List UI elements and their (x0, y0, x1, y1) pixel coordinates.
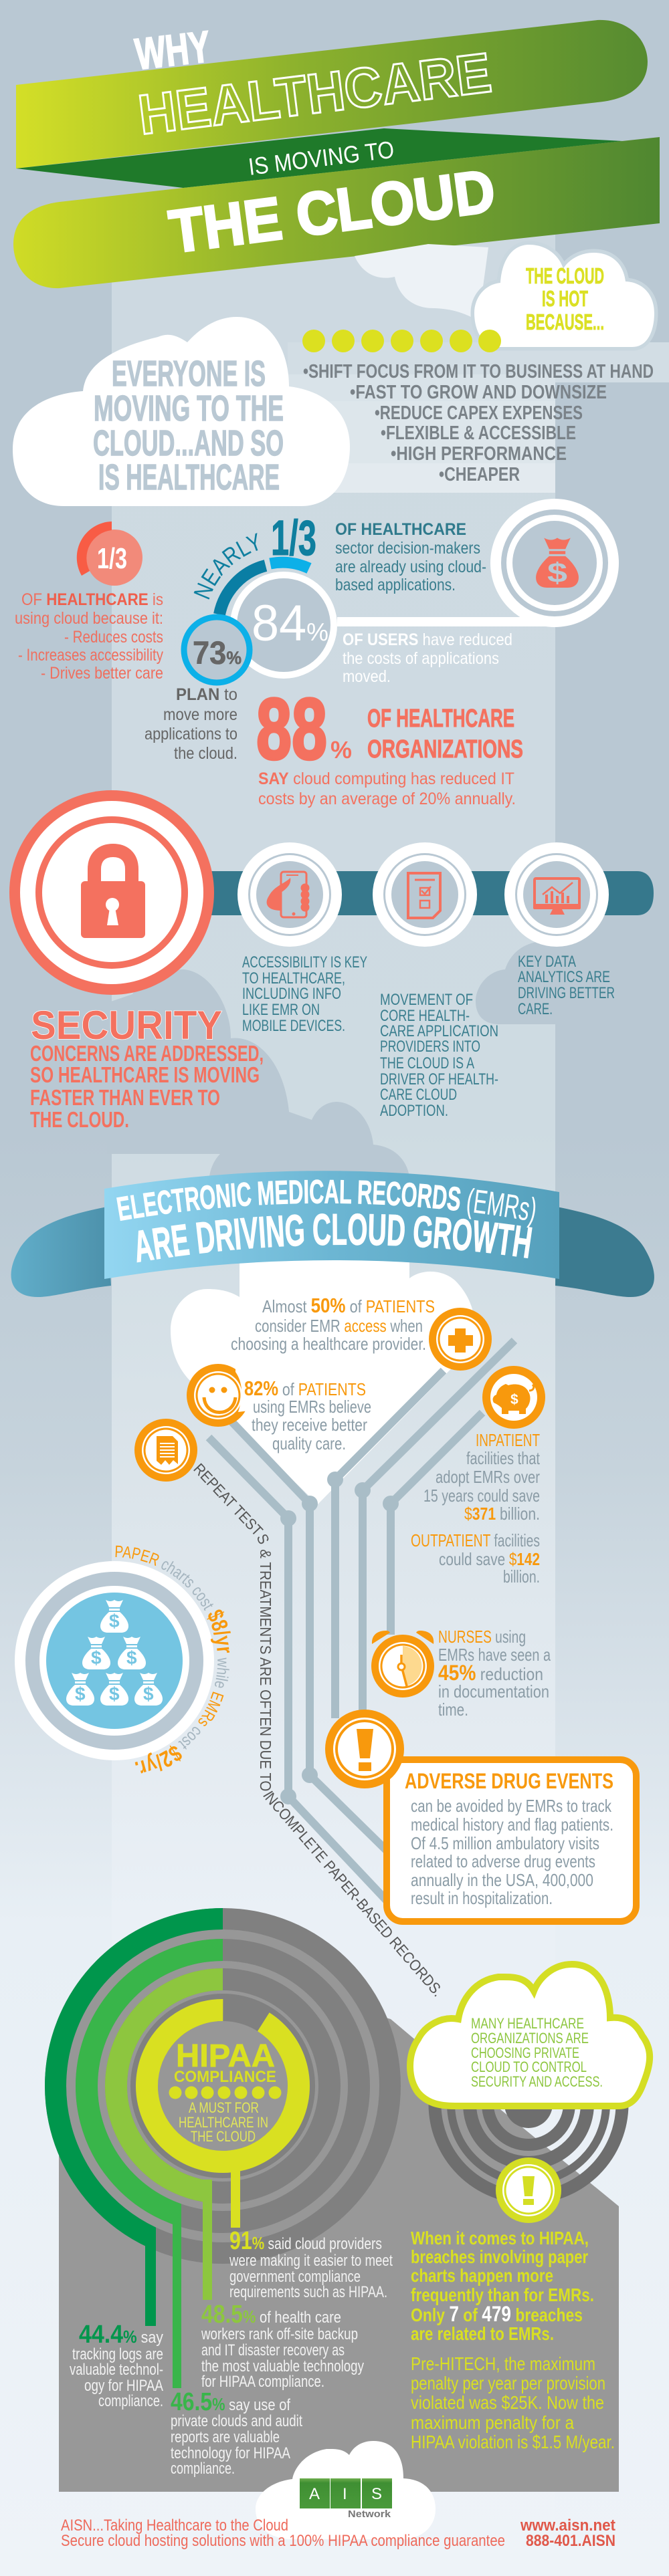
security text (30, 1003, 264, 1132)
callout body: related to adverse drug events (411, 1851, 595, 1871)
text: 48.5 percent (201, 2301, 364, 2391)
bullet list: reasons: •REDUCE CAPEX EXPENSES (375, 402, 583, 424)
text: healthcare using cloud because: OF HEALTHCARE is (21, 590, 163, 609)
text: 48.5 percent: workers rank off-site backup (201, 2325, 358, 2343)
text: movement of core: CARE CLOUD (380, 1086, 457, 1104)
hipaa subtitle: HEALTHCARE IN (179, 2114, 268, 2131)
icon: stacked money bags: $ (109, 1683, 120, 1704)
text: inpatient outpatient: adopt EMRs over (436, 1467, 540, 1487)
text: hipaa breaches (411, 2228, 594, 2344)
bullet list: reasons: •HIGH PERFORMANCE (391, 443, 567, 465)
cloud: everyone is moving (13, 317, 350, 506)
dark cloud right (476, 941, 555, 1024)
ring: document (373, 842, 477, 947)
ribbon body (104, 1171, 559, 1279)
callout body: can be avoided by EMRs to track (411, 1796, 612, 1816)
connector lines (209, 1340, 514, 1902)
cloud heading (93, 354, 284, 497)
text: plan to move: applications to (145, 725, 237, 743)
text: penalties: Pre-HITECH, the maximum (411, 2353, 595, 2374)
bullet list: reasons: •CHEAPER (439, 464, 520, 485)
text: plan to move: PLAN to (176, 685, 237, 704)
text: healthcare using cloud because: - Increases accessibility (18, 646, 163, 665)
text: eighty two percent patients (244, 1377, 371, 1453)
text: key data analytics: DRIVING BETTER (518, 984, 615, 1002)
bar: 91 percent (231, 2166, 240, 2228)
pale background cloud (355, 244, 488, 321)
text: hipaa breaches: When it comes to HIPAA, (411, 2228, 589, 2248)
cloud heading: EVERYONE IS (112, 354, 266, 394)
label 73 percent: 73% (193, 636, 242, 671)
text: fifty percent patients: consider EMR access when (255, 1316, 423, 1336)
cloud heading: MOVING TO THE (94, 388, 284, 429)
text: of users: OF USERS have reduced (343, 630, 512, 649)
ribbon right tail (555, 1207, 654, 1297)
text: hipaa breaches: charts happen more (411, 2265, 553, 2286)
ring icon: plus (429, 1308, 492, 1371)
text: of healthcare sector: are already using cloud- (335, 558, 486, 576)
ring icon: piggy bank: $ (510, 1392, 518, 1407)
bent text: repeat tests: REPEAT TESTS & TREATMENTS ARE OFTEN DUE TO INCOMPLETE PAPER-BASED RECORDS. (193, 1463, 440, 1996)
text: healthcare using cloud because: - Drives better care (41, 664, 163, 683)
text: 48.5 percent: the most valuable technology (201, 2357, 364, 2375)
light bands behind bullet list (288, 342, 669, 493)
text: nurses: time. (438, 1700, 468, 1720)
cloud: private cloud (410, 1964, 650, 2106)
text: healthcare using cloud because (15, 590, 163, 683)
money bags circle (15, 1561, 214, 1760)
ring: 46.5 percent (76, 1939, 223, 2224)
text: nurses: 45% reduction (438, 1661, 543, 1685)
text: penalties (411, 2353, 615, 2452)
logo letters: A (309, 2485, 320, 2503)
icon: money bag (536, 538, 579, 588)
footer tagline: Secure cloud hosting solutions with a 100% HIPAA compliance guarantee (61, 2532, 505, 2550)
text: movement of core (380, 991, 498, 1120)
big one third: 1/3 (271, 510, 316, 566)
text: accessibility: INCLUDING INFO (242, 985, 341, 1003)
teal bar (201, 871, 654, 915)
callout body: annually in the USA, 400,000 (411, 1870, 593, 1890)
ring icon: paper (134, 1419, 197, 1482)
text: 46.5 percent: 46.5% say use of (171, 2388, 290, 2416)
text: hipaa breaches: Only 7 of 479 breaches (411, 2302, 583, 2326)
icon: checklist (408, 873, 440, 918)
callout body (411, 1796, 613, 1908)
text: of healthcare sector: sector decision-makers (335, 539, 480, 558)
text: penalties: penalty per year per provision (411, 2373, 605, 2393)
text: hipaa breaches: breaches involving paper (411, 2246, 588, 2267)
dark concentric rings right (435, 2010, 622, 2198)
text: 44.4 percent: compliance. (98, 2392, 163, 2410)
hipaa dots (169, 2086, 281, 2099)
text: 48.5 percent: 48.5% of health care (201, 2301, 341, 2329)
stat: 88 percent: % (330, 736, 352, 764)
title words: the cloud: THE CLOUD (166, 158, 499, 266)
text: inpatient outpatient: INPATIENT (476, 1430, 540, 1450)
cloud text: MANY HEALTHCARE (471, 2015, 584, 2032)
text: movement of core: MOVEMENT OF (380, 991, 473, 1009)
callout body: Of 4.5 million ambulatory visits (411, 1833, 599, 1853)
ring icon: smile (187, 1364, 254, 1427)
emr ribbon (11, 1171, 654, 1297)
text: 48.5 percent: and IT disaster recovery as (201, 2341, 345, 2359)
text: inpatient outpatient: billion. (503, 1566, 540, 1587)
text: inpatient outpatient: 15 years could save (423, 1486, 540, 1506)
text: 91 percent: were making it easier to meet (229, 2252, 393, 2270)
text: movement of core: DRIVER OF HEALTH- (380, 1070, 498, 1088)
bullet list: reasons (303, 361, 654, 485)
bullet list: reasons: •FLEXIBLE & ACCESSIBLE (381, 423, 576, 444)
security subtext: CONCERNS ARE ADDRESSED, (30, 1041, 264, 1066)
security subtext (30, 1041, 264, 1132)
text: movement of core: CORE HEALTH- (380, 1007, 470, 1025)
gray hipaa panel (59, 1999, 619, 2492)
ring: analytics (504, 842, 609, 947)
bullet list: reasons: •FAST TO GROW AND DOWNSIZE (350, 382, 607, 403)
ribbon left tail (11, 1207, 111, 1297)
icon: hand holding phone (267, 872, 309, 917)
text: accessibility: MOBILE DEVICES. (242, 1017, 345, 1035)
hipaa concentric rings (45, 1908, 401, 2388)
bar: 44.4 percent (145, 2233, 156, 2326)
text: 44.4 percent: ogy for HIPAA (84, 2377, 163, 2395)
text: nurses (438, 1627, 551, 1720)
callout: adverse drug events (325, 1710, 636, 1921)
icon: stacked money bags (66, 1600, 163, 1706)
text: inpatient outpatient: OUTPATIENT facilities (411, 1530, 540, 1550)
text: 44.4 percent: tracking logs are (72, 2345, 163, 2363)
ribbon upper band (16, 20, 648, 168)
logo network: Network (348, 2508, 391, 2520)
icon: stacked money bags: $ (91, 1647, 102, 1668)
icon: padlock (81, 850, 145, 938)
money ring and connector (337, 499, 619, 627)
text: penalties: HIPAA violation is $1.5 M/year. (411, 2432, 615, 2452)
text: nurses: EMRs have seen a (438, 1645, 551, 1665)
text: movement of core: THE CLOUD IS A (380, 1054, 474, 1072)
text: 91 percent: government compliance (229, 2268, 361, 2286)
callout heading: ADVERSE DRUG EVENTS (405, 1769, 613, 1793)
text: key data analytics (518, 953, 615, 1018)
heading: security: SECURITY (31, 1003, 222, 1048)
text: 46.5 percent: compliance. (171, 2460, 235, 2478)
pie label: 1/3 (97, 542, 127, 575)
footer tagline (61, 2516, 505, 2550)
dark cloud behind security (107, 969, 409, 1177)
text: 44.4 percent: 44.4% say (79, 2321, 163, 2349)
text: accessibility: LIKE EMR ON (242, 1001, 320, 1019)
text: plan to move: move more (163, 705, 237, 724)
text: eighty two percent patients: quality care. (272, 1433, 346, 1453)
logo tiles (300, 2478, 392, 2508)
compliance heading: COMPLIANCE (174, 2068, 276, 2086)
stat: 88 percent: ORGANIZATIONS (367, 735, 523, 764)
clock bells (372, 1631, 434, 1644)
ring icon: piggy bank (482, 1366, 545, 1429)
text: movement of core: PROVIDERS INTO (380, 1038, 480, 1056)
text: inpatient outpatient: facilities that (466, 1448, 541, 1468)
yellow dots row (302, 330, 501, 352)
icon: money bag: $ (547, 557, 567, 588)
footer contact (520, 2516, 615, 2550)
text: 91 percent (229, 2227, 393, 2301)
cloud text (471, 2015, 603, 2090)
text: key data analytics: CARE. (518, 1000, 553, 1018)
text: accessibility: ACCESSIBILITY IS KEY (242, 953, 367, 971)
bar: 48.5 percent (203, 2180, 212, 2300)
cloud heading: CLOUD...AND SO (93, 423, 284, 463)
hipaa heading: HIPAA (176, 2038, 275, 2074)
text: key data analytics: KEY DATA (518, 953, 576, 971)
ring: phone (237, 842, 342, 947)
text: of healthcare sector: based applications. (335, 576, 456, 594)
cloud text: CLOUD TO CONTROL (471, 2059, 587, 2075)
text: nurses: NURSES using (438, 1627, 526, 1647)
footer contact: 888-401.AISN (526, 2532, 615, 2550)
text: of healthcare sector: OF HEALTHCARE (335, 520, 466, 539)
icon: stacked money bags: $ (75, 1683, 86, 1704)
text: plan to move (145, 685, 237, 763)
text: movement of core: ADOPTION. (380, 1102, 448, 1120)
stat: 88 percent: OF HEALTHCARE (367, 705, 514, 733)
cloud text: SECURITY AND ACCESS. (471, 2073, 603, 2090)
ring 73 percent (184, 617, 250, 683)
callout body: medical history and flag patients. (411, 1814, 613, 1835)
cloud caption: IS HOT (542, 286, 588, 311)
security subtext: SO HEALTHCARE IS MOVING (30, 1062, 260, 1087)
text: eighty two percent patients: they receive better (252, 1415, 367, 1435)
text: fifty percent patients: Almost 50% of PATIENTS (262, 1294, 435, 1317)
security lock ring (9, 790, 214, 995)
arc: nearly one third (219, 566, 266, 614)
white cloud: emr (171, 1257, 476, 1504)
stat: 88 percent: 88 (256, 680, 327, 778)
text: 91 percent: requirements such as HIPAA. (229, 2283, 387, 2301)
text: 46.5 percent: technology for HIPAA (171, 2444, 290, 2462)
text: inpatient outpatient: $371 billion. (464, 1504, 540, 1524)
text: accessibility: TO HEALTHCARE, (242, 969, 345, 987)
text: healthcare using cloud because: - Reduces costs (64, 628, 163, 647)
logo letters: S (371, 2485, 382, 2503)
text: eighty two percent patients: using EMRs believe (253, 1397, 371, 1417)
text: penalties: violated was $25K. Now the (411, 2392, 604, 2413)
cloud caption: THE CLOUD (526, 263, 604, 288)
alarm clock (371, 1631, 434, 1697)
footer tagline: AISN...Taking Healthcare to the Cloud (61, 2516, 288, 2535)
text: of users (343, 630, 512, 686)
title word: why: WHY (132, 21, 213, 79)
hipaa subtitle: A MUST FOR (189, 2099, 259, 2116)
text: of users: moved. (343, 667, 391, 686)
text: penalties: maximum penalty for a (411, 2412, 574, 2433)
stat: 88 percent (256, 680, 523, 808)
stat: 88 percent: costs by an average of 20% annually. (258, 790, 516, 808)
cloud text: CHOOSING PRIVATE (471, 2044, 579, 2061)
text: key data analytics: ANALYTICS ARE (518, 968, 610, 986)
security subtext: FASTER THAN EVER TO (30, 1085, 220, 1110)
ring 84 percent (233, 575, 334, 675)
ring icon: yellow exclamation (496, 2157, 561, 2223)
logo letters: I (343, 2485, 347, 2503)
stat: one third pie (77, 521, 142, 586)
text: inpatient outpatient: could save $142 (439, 1549, 540, 1569)
title words: is moving to: IS MOVING TO (247, 136, 395, 181)
curved label nearly: NEARLY (194, 533, 258, 600)
arc: light blue (270, 562, 309, 568)
ribbon lower band (13, 137, 660, 288)
light centre column (112, 234, 555, 2576)
text: nurses: in documentation (438, 1681, 549, 1702)
text: inpatient outpatient (411, 1430, 541, 1587)
cloud caption: BECAUSE... (526, 310, 604, 334)
ribbon line two: ARE DRIVING CLOUD GROWTH (136, 1213, 533, 1262)
text: healthcare using cloud because: using cloud because it: (15, 609, 163, 628)
text: of users: the costs of applications (343, 649, 499, 668)
icon: stacked money bags: $ (126, 1647, 137, 1668)
logo letters (309, 2485, 382, 2503)
cloud heading: IS HEALTHCARE (98, 457, 280, 497)
ring icon: exclamation (325, 1710, 404, 1788)
ribbon line one: ELECTRONIC MEDICAL RECORDS (EMRs) (116, 1179, 535, 1227)
icon: stacked money bags: $ (109, 1611, 120, 1631)
ring: 48.5 percent (105, 1968, 223, 2202)
stat: 88 percent: SAY cloud computing has reduced IT (258, 770, 514, 788)
ribbon fold (16, 128, 623, 188)
bar: 46.5 percent (173, 2206, 181, 2388)
text: eighty two percent patients: 82% of PATIENTS (244, 1377, 366, 1400)
text: movement of core: CARE APPLICATION (380, 1022, 498, 1040)
security subtext: THE CLOUD. (30, 1107, 129, 1132)
footer contact: www.aisn.net (520, 2516, 615, 2535)
hipaa subtitle: THE CLOUD (191, 2128, 256, 2145)
text: 44.4 percent: valuable technol- (70, 2361, 163, 2379)
text: 91 percent: 91% said cloud providers (229, 2227, 382, 2255)
cloud: the cloud is hot because (474, 245, 654, 347)
logo cloud (256, 2441, 436, 2539)
ring: 44.4 percent (45, 1908, 223, 2246)
title word: healthcare: HEALTHCARE (135, 41, 494, 146)
icon: monitor chart (533, 879, 581, 915)
label 84 percent: 84% (252, 595, 328, 652)
text: accessibility (242, 953, 367, 1035)
text: hipaa breaches: frequently than for EMRs. (411, 2285, 594, 2305)
callout body: result in hospitalization. (411, 1888, 553, 1908)
text: of healthcare sector (335, 520, 486, 594)
icon: stacked money bags: $ (143, 1683, 154, 1704)
cloud text: ORGANIZATIONS ARE (471, 2030, 589, 2046)
curved text: paper charts cost: PAPER charts cost $8/yr while EMRs cost $2/yr. (115, 1546, 231, 1773)
text: fifty percent patients: choosing a healthcare provider. (231, 1334, 426, 1354)
text: plan to move: the cloud. (174, 744, 237, 763)
title ribbon (13, 20, 660, 288)
text: 46.5 percent: reports are valuable (171, 2428, 280, 2446)
stat rings: 84 percent and nearly one third (181, 510, 337, 686)
text: 48.5 percent: for HIPAA compliance. (201, 2373, 324, 2391)
cloud caption (526, 263, 604, 334)
text: 46.5 percent: private clouds and audit (171, 2412, 302, 2430)
ring: 91 percent (158, 2021, 288, 2151)
text: fifty percent patients (231, 1294, 435, 1354)
text: 44.4 percent (70, 2321, 163, 2410)
text: 46.5 percent (171, 2388, 302, 2478)
text: hipaa breaches: are related to EMRs. (411, 2323, 554, 2344)
hipaa subtitle (179, 2099, 268, 2145)
